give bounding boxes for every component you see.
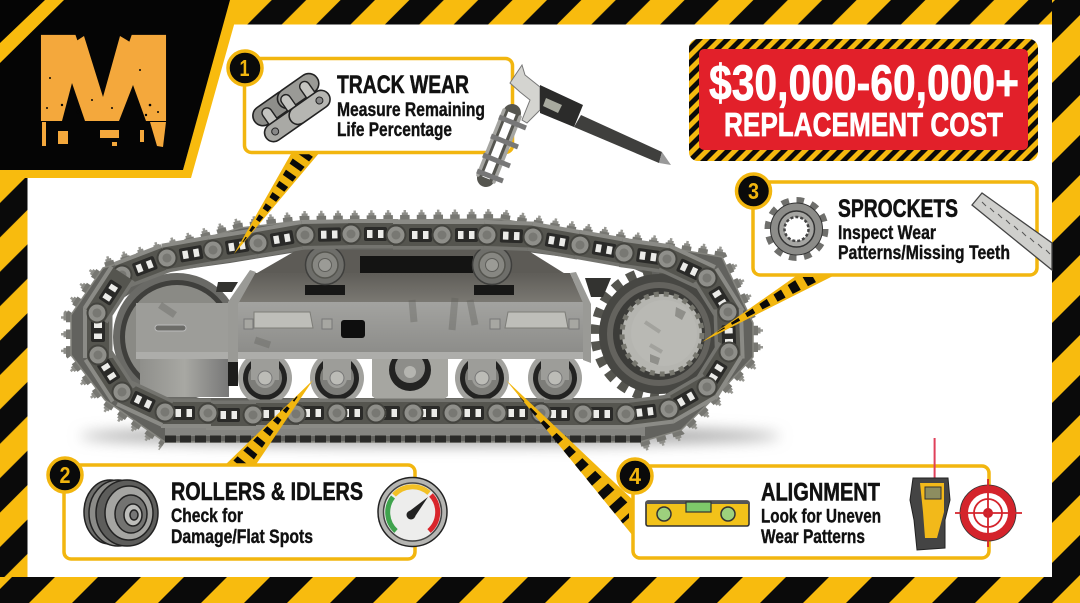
frame upper — [245, 250, 575, 280]
red panel — [699, 49, 1028, 150]
ground shadow — [80, 426, 780, 446]
lower block — [140, 358, 229, 397]
description: Look for Uneven — [761, 506, 881, 528]
icon: spirit level — [646, 501, 749, 526]
description — [337, 100, 485, 141]
sprocket — [596, 271, 722, 397]
description — [761, 506, 881, 548]
number badge 2: 2 — [60, 462, 70, 488]
description: Wear Patterns — [761, 527, 865, 548]
icon: chain link — [249, 70, 334, 145]
number badge 4 — [618, 459, 652, 493]
logo letter: M — [29, 0, 178, 182]
icon: ruler — [972, 193, 1052, 270]
number badge 3 — [736, 174, 770, 208]
main frame — [136, 270, 591, 363]
icon: roller — [84, 480, 158, 546]
interior opening — [112, 252, 712, 398]
callout 3: sprockets — [736, 174, 1037, 275]
undercarriage track assembly — [71, 219, 753, 442]
pointer: rollers and idlers — [224, 380, 313, 466]
callout 2: rollers and idlers — [48, 458, 447, 559]
chain sample — [477, 110, 526, 182]
icon: laser measure — [910, 438, 950, 550]
description: Measure Remaining — [337, 100, 485, 121]
track rollers — [238, 350, 582, 405]
heading: SPROCKETS — [838, 195, 958, 223]
number badge 1: 1 — [240, 55, 250, 81]
description: Damage/Flat Spots — [171, 527, 313, 548]
track shoe band — [71, 219, 753, 442]
track teeth — [71, 219, 753, 442]
frame top face — [237, 273, 583, 302]
heading: TRACK WEAR — [337, 71, 469, 99]
logo panel — [0, 0, 241, 182]
number badge 3: 3 — [748, 178, 759, 204]
caliper jaws — [510, 65, 540, 123]
dark frame gaps — [216, 278, 611, 297]
description: Check for — [171, 506, 243, 527]
description — [838, 223, 1010, 264]
description — [171, 506, 313, 548]
centre roller housing — [372, 349, 448, 404]
pointer: alignment — [506, 380, 633, 536]
number badge 2 — [48, 458, 82, 492]
icon: sprocket gear — [768, 200, 825, 258]
description: Life Percentage — [337, 120, 452, 141]
pointer: track wear — [234, 152, 320, 254]
icon: caliper and chain sample — [477, 65, 671, 182]
track shoes, bottom row — [165, 425, 645, 439]
heading: ALIGNMENT — [761, 478, 880, 506]
callout 1: track wear — [228, 51, 512, 152]
caliper rail — [574, 115, 662, 163]
icon: target — [955, 479, 1022, 547]
description: Inspect Wear — [838, 223, 936, 244]
heading: ROLLERS & IDLERS — [171, 478, 363, 506]
carrier rollers — [306, 246, 512, 284]
idler wheel — [113, 273, 241, 401]
caliper display body — [540, 85, 583, 127]
pointer: sprockets — [702, 276, 833, 342]
track links — [79, 219, 747, 430]
cost figure: $30,000-60,000+ — [709, 55, 1019, 111]
callout 4: alignment — [618, 438, 1022, 558]
tread plates — [254, 312, 313, 328]
cost banner — [689, 39, 1038, 161]
number badge 4: 4 — [629, 463, 641, 489]
description: Patterns/Missing Teeth — [838, 243, 1010, 264]
cost label: REPLACEMENT COST — [724, 106, 1003, 143]
icon: gauge — [378, 478, 447, 546]
number badge 1 — [228, 51, 262, 85]
